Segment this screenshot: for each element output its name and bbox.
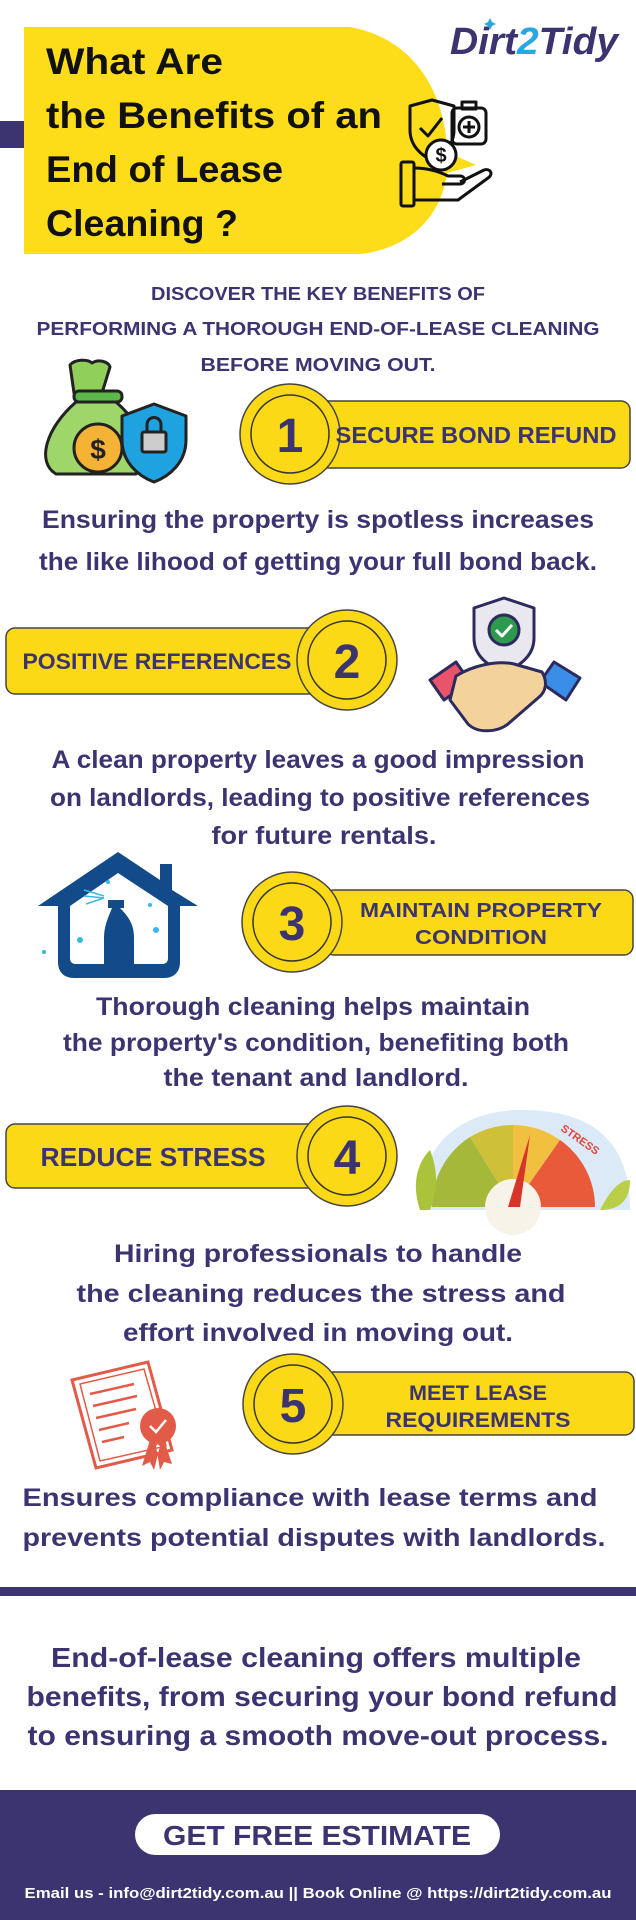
- badge 5: REQUIREMENTS: [386, 1409, 570, 1432]
- icon: stress gauge: STRESS: [558, 1123, 601, 1158]
- icon: house with spray: [38, 852, 198, 978]
- badge 4: REDUCE STRESS: [40, 1142, 266, 1172]
- title: [46, 41, 382, 244]
- title: What Are: [46, 41, 223, 82]
- subtitle: BEFORE MOVING OUT.: [200, 355, 436, 375]
- logo: Dirt2Tidy: [450, 21, 620, 63]
- title: Cleaning ?: [46, 203, 238, 244]
- text block 3: Thorough cleaning helps maintain: [96, 993, 530, 1021]
- text block 1: Ensuring the property is spotless increases: [42, 506, 594, 534]
- badge 1: 1: [277, 410, 303, 463]
- icon: money bag with shield: $: [90, 434, 106, 465]
- text block 2: on landlords, leading to positive references: [50, 784, 590, 812]
- subtitle: [36, 284, 600, 375]
- title: the Benefits of an: [46, 95, 382, 136]
- badge 1: SECURE BOND REFUND: [336, 422, 616, 448]
- icon: certificate: [72, 1362, 176, 1470]
- title bubble: [24, 27, 476, 254]
- text block 2: [50, 746, 590, 850]
- text block 3: [63, 993, 569, 1092]
- badge 3: [242, 872, 633, 972]
- left accent bar: [0, 121, 26, 148]
- closing statement: [26, 1642, 618, 1751]
- badge 5: [243, 1354, 634, 1454]
- badge 2: 2: [334, 636, 360, 689]
- badge 3: 3: [279, 898, 305, 951]
- icon: handshake with shield: [430, 598, 580, 731]
- closing statement: End-of-lease cleaning offers multiple: [51, 1642, 581, 1673]
- badge 5: MEET LEASE: [409, 1382, 547, 1405]
- text block 1: the like lihood of getting your full bond back.: [39, 548, 597, 576]
- text block 4: effort involved in moving out.: [123, 1319, 513, 1347]
- closing statement: to ensuring a smooth move-out process.: [28, 1720, 608, 1751]
- subtitle: PERFORMING A THOROUGH END-OF-LEASE CLEANING: [36, 319, 600, 339]
- text block 5: prevents potential disputes with landlords.: [22, 1524, 606, 1552]
- text block 3: the property's condition, benefiting both: [63, 1029, 569, 1057]
- badge 1: [240, 384, 630, 484]
- badge 4: [6, 1106, 397, 1206]
- text block 4: [76, 1240, 566, 1347]
- icon: hand with shield, coin, kit: [401, 100, 491, 206]
- icon: money bag with shield: [46, 360, 186, 482]
- footer: [0, 1790, 636, 1920]
- text block 5: Ensures compliance with lease terms and: [22, 1484, 598, 1512]
- contact line: Email us - info@dirt2tidy.com.au || Book Online @ https://dirt2tidy.com.au: [24, 1885, 612, 1902]
- text block 2: A clean property leaves a good impression: [52, 746, 584, 774]
- text block 4: the cleaning reduces the stress and: [76, 1280, 566, 1308]
- text block 4: Hiring professionals to handle: [114, 1240, 522, 1268]
- badge 5: 5: [280, 1380, 306, 1433]
- text block 1: [39, 506, 597, 576]
- badge 4: 4: [334, 1132, 361, 1185]
- badge 2: POSITIVE REFERENCES: [22, 649, 292, 674]
- title: End of Lease: [46, 149, 283, 190]
- button: get free estimate: [135, 1814, 500, 1855]
- badge 2: [6, 610, 397, 710]
- badge 3: CONDITION: [415, 927, 547, 949]
- icon: stress gauge: [416, 1110, 630, 1235]
- button: get free estimate: GET FREE ESTIMATE: [163, 1820, 471, 1851]
- text block 2: for future rentals.: [212, 822, 436, 850]
- badge 3: MAINTAIN PROPERTY: [360, 900, 603, 922]
- text block 3: the tenant and landlord.: [164, 1064, 468, 1092]
- closing statement: benefits, from securing your bond refund: [26, 1681, 618, 1712]
- text block 5: [22, 1484, 606, 1552]
- icon: hand with shield, coin, kit: $: [435, 145, 447, 167]
- subtitle: DISCOVER THE KEY BENEFITS OF: [151, 284, 485, 304]
